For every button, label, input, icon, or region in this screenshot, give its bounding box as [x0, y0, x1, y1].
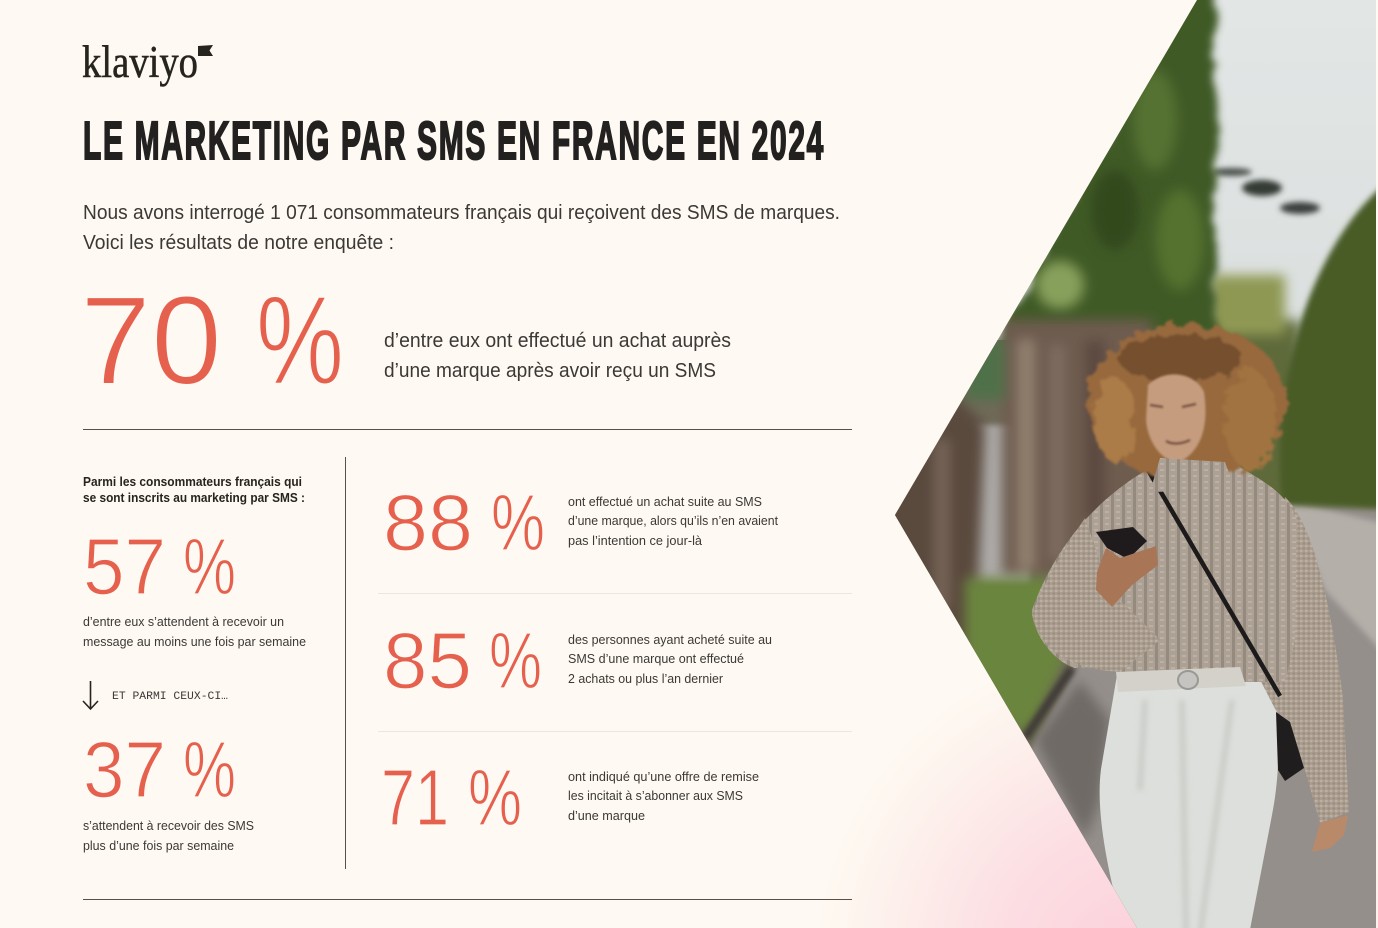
- number: %: [256, 270, 344, 411]
- lower photo base: [895, 340, 1137, 928]
- description: SMS d’une marque ont effectué: [568, 651, 744, 666]
- number: %: [491, 478, 545, 567]
- stat 57 %: %: [183, 522, 236, 611]
- phone: [1096, 527, 1147, 559]
- icon: down arrow: [83, 681, 98, 709]
- description: ont effectué un achat suite au SMS: [568, 494, 762, 509]
- bag strap: [1148, 470, 1280, 696]
- number: [80, 270, 344, 411]
- stat 37 % description: s’attendent à recevoir des SMS: [83, 818, 254, 833]
- stat row: 88 %: [383, 478, 778, 567]
- bag: [1276, 712, 1304, 781]
- description: d’une marque après avoir reçu un SMS: [384, 360, 716, 382]
- stat row: 85 %: [383, 616, 772, 705]
- eyes and mouth: [1150, 404, 1196, 444]
- foliage highlights: [1036, 70, 1204, 309]
- description: [568, 769, 759, 823]
- hair: [1087, 324, 1287, 480]
- description: des personnes ayant acheté suite au: [568, 632, 772, 647]
- stat row: 71 %: [381, 753, 759, 842]
- number: 71: [381, 753, 449, 842]
- column intro: se sont inscrits au marketing par SMS :: [83, 490, 305, 505]
- jeans: [1100, 672, 1279, 928]
- logo: klaviyo: [82, 37, 213, 87]
- pavement: [1030, 500, 1378, 928]
- sky: [998, 0, 1376, 340]
- description: d’entre eux ont effectué un achat auprès: [384, 330, 731, 352]
- background mid-tone behind woman: [1204, 310, 1303, 499]
- curb: [1025, 668, 1072, 738]
- distant yellow trees: [1210, 275, 1285, 335]
- pink gradient glow: [780, 640, 1378, 928]
- intro text: Nous avons interrogé 1 071 consommateurs français qui reçoivent des SMS de marques.: [83, 202, 840, 224]
- sweater: [1032, 462, 1297, 682]
- stat 37 %: %: [183, 725, 236, 814]
- headline stat: 70 %: [80, 270, 731, 411]
- logo wordmark: klaviyo: [82, 37, 198, 87]
- right hand: [1312, 815, 1348, 852]
- description: ont indiqué qu’une offre de remise: [568, 769, 759, 784]
- far sidewalk: [1292, 504, 1376, 648]
- number: [381, 753, 522, 842]
- description: pas l’intention ce jour-là: [568, 533, 703, 548]
- number: [383, 478, 545, 567]
- stat 57 %: 57: [83, 522, 166, 611]
- description: [384, 330, 731, 382]
- stat 57 % description: d’entre eux s’attendent à recevoir un: [83, 614, 284, 629]
- pavement shadow near curb: [1035, 680, 1110, 840]
- face: [1146, 374, 1205, 462]
- description: [568, 632, 772, 686]
- stat 57 % description: message au moins une fois par semaine: [83, 634, 306, 649]
- left column: [83, 474, 306, 853]
- number: 88: [383, 478, 473, 567]
- stat 37 %: [83, 725, 236, 814]
- number: 70: [80, 270, 222, 411]
- hand holding phone: [1096, 546, 1158, 607]
- foliage: [1000, 0, 1216, 345]
- intro text: Voici les résultats de notre enquête :: [83, 232, 394, 254]
- number: %: [468, 753, 522, 842]
- right hedge: [1280, 180, 1378, 510]
- description: d’une marque: [568, 808, 645, 823]
- belt: [1116, 667, 1246, 692]
- description: [568, 494, 778, 548]
- intro text: [83, 202, 840, 254]
- grass: [965, 578, 1066, 735]
- neck of sweater: [1150, 458, 1235, 492]
- right arm of sweater: [1255, 497, 1349, 823]
- logo flag: [198, 45, 213, 56]
- left sleeve: [1032, 518, 1160, 672]
- description: les incitait à s’abonner aux SMS: [568, 788, 743, 803]
- number: 85: [383, 616, 472, 705]
- connector label: ET PARMI CEUX-CI…: [112, 691, 228, 703]
- column intro: Parmi les consommateurs français qui: [83, 474, 302, 489]
- description: d’une marque, alors qu’ils n’en avaient: [568, 513, 778, 528]
- road behind trees: [972, 422, 1032, 584]
- stat 57 % description: [83, 614, 306, 649]
- stat 37 %: 37: [83, 725, 166, 814]
- tree trunks: [875, 320, 1152, 650]
- number: [383, 616, 542, 705]
- photo: woman looking at her phone, arrow-shaped crop: [875, 0, 1378, 928]
- number: %: [489, 616, 542, 705]
- branch: [1212, 168, 1320, 214]
- column intro: [83, 474, 305, 505]
- stat 37 % description: [83, 818, 254, 853]
- stat 37 % description: plus d’une fois par semaine: [83, 838, 234, 853]
- stat 57 %: [83, 522, 236, 611]
- description: 2 achats ou plus l’an dernier: [568, 671, 724, 686]
- belt buckle: [1178, 671, 1198, 689]
